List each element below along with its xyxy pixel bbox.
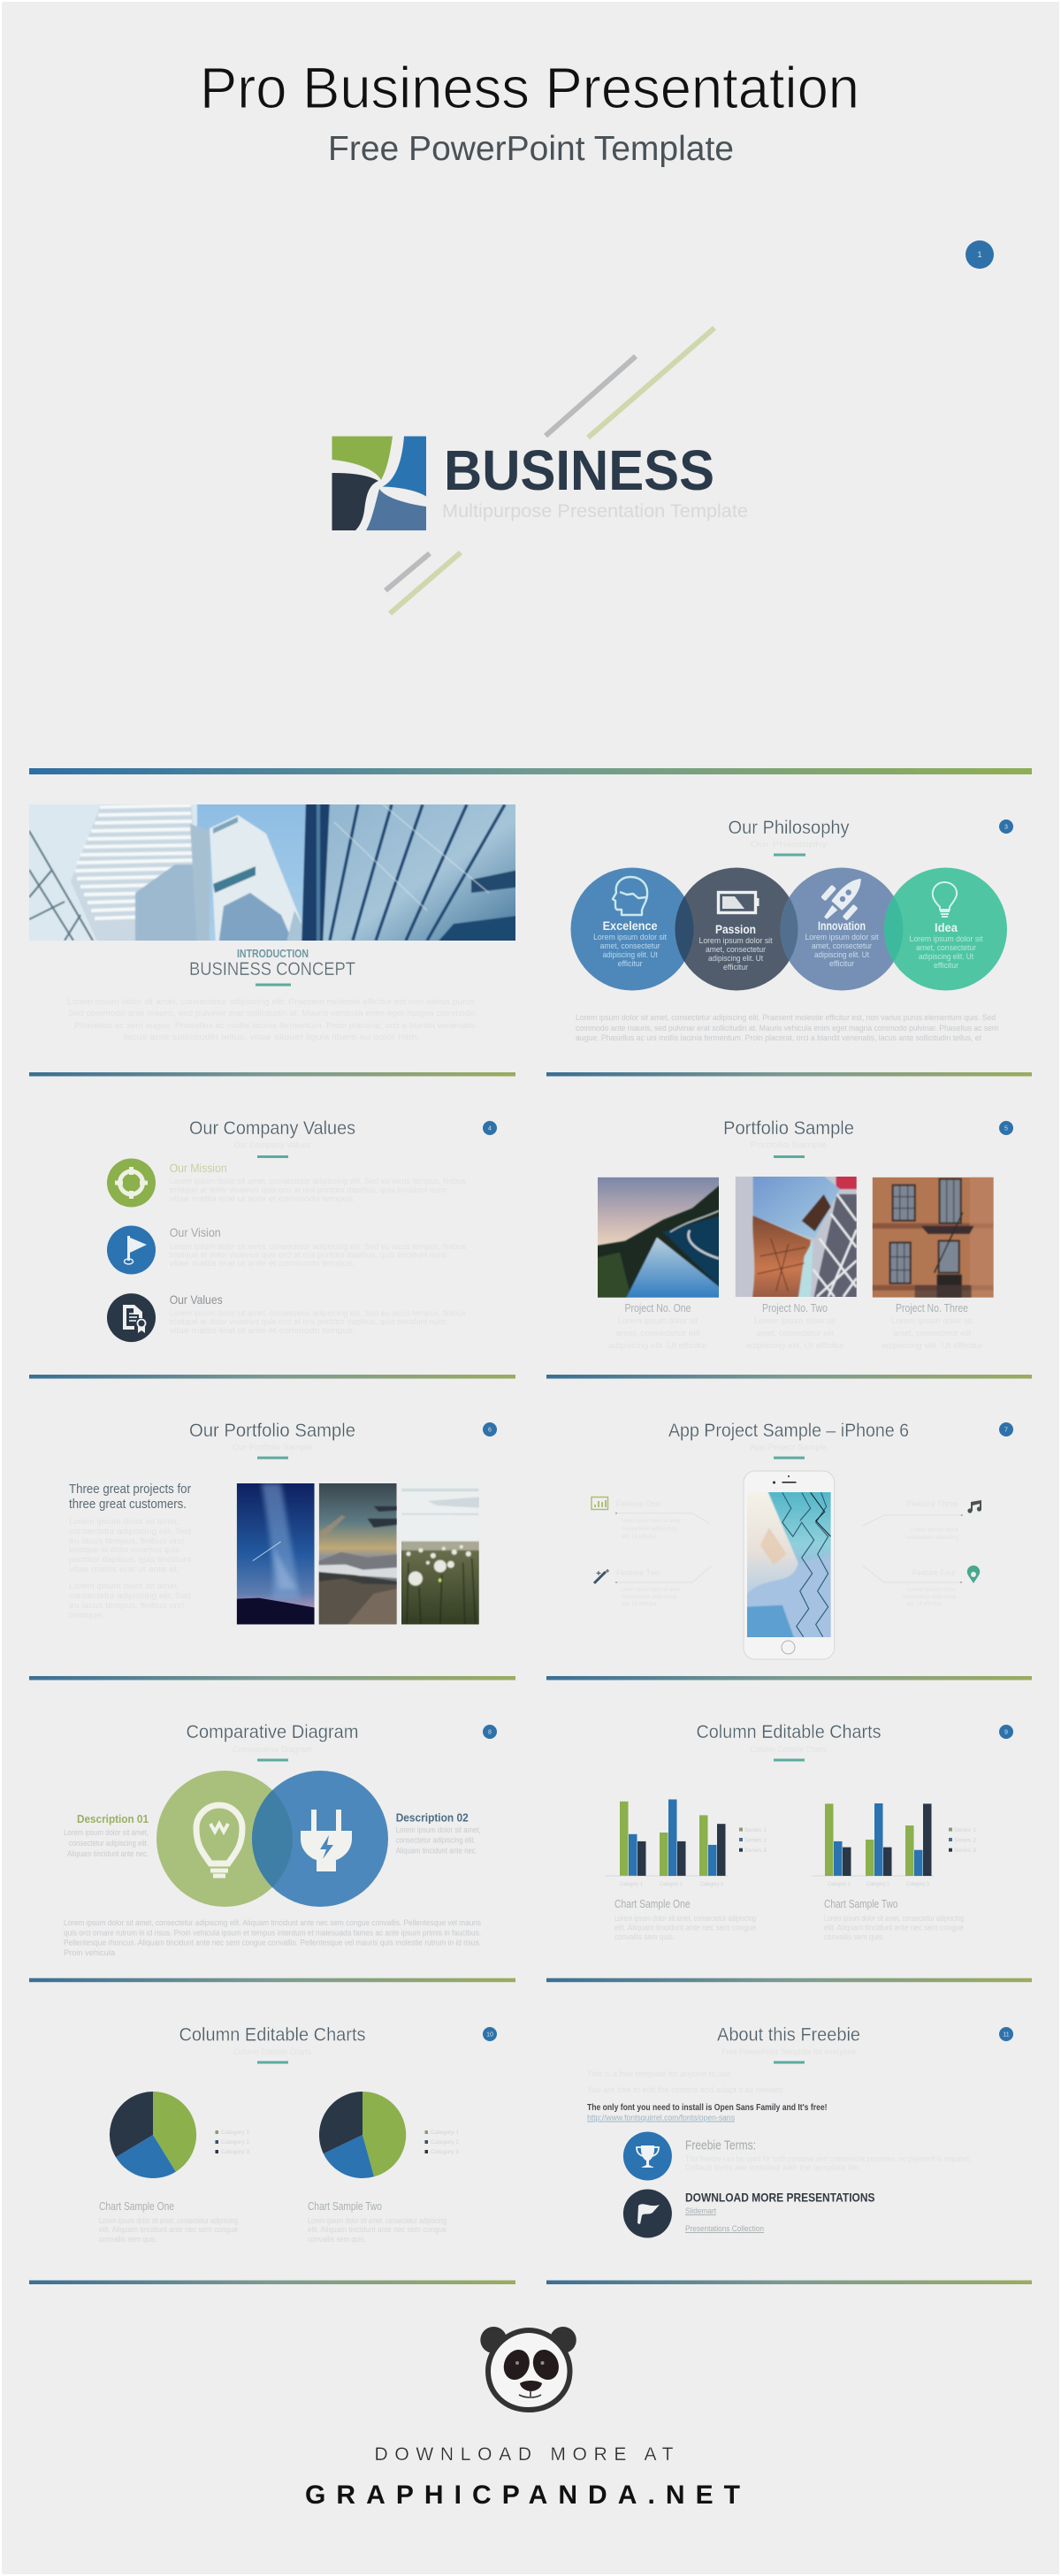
bar chart: two: Category 3 xyxy=(906,1882,930,1887)
font link: http://www.fontsquirrel.com/fonts/open-sans xyxy=(587,2113,735,2123)
page badge 3: 3 xyxy=(1004,824,1008,831)
footer xyxy=(305,2327,740,2510)
circle: innovation: Lorem ipsum dolor sit xyxy=(805,933,879,942)
circle: excelence xyxy=(571,868,693,990)
circle: innovation: amet, consectetur xyxy=(812,941,872,951)
caption: chart one: Chart Sample One xyxy=(99,2199,174,2213)
body text: consectetur adipiscing elit. Sed xyxy=(69,1527,191,1536)
lead text xyxy=(69,1482,191,1512)
item: our vision: Our Vision xyxy=(170,1225,221,1239)
circle: passion: amet, consectetur xyxy=(706,945,766,955)
page badge 11: 11 xyxy=(1003,2031,1010,2039)
icon: rocket xyxy=(813,867,874,930)
body text: quis orci ornare rutrum in id risus. Proin vehicula ipsum et tempus interdum et malesuada fames ac ante ipsum primis in faucibus. xyxy=(64,1929,481,1938)
body text: eu lacus tempus, finibus orci xyxy=(69,1536,184,1545)
subheading: Comparative Diagram xyxy=(233,1745,312,1754)
caption: chart one: elit. Aliquam tincidunt ante nec sem congue xyxy=(614,1924,756,1932)
item: our mission: Our Mission xyxy=(170,1161,227,1175)
overlap xyxy=(780,898,798,960)
caption: chart one: Lorem ipsum dolor sit amet, consectetur adipiscing xyxy=(99,2216,238,2225)
heading: Comparative Diagram xyxy=(186,1722,359,1742)
body text: Sed commodo ante mauris, sed pulvinar erat sollicitudin at. Mauris vehicula enim eget magna commodo. xyxy=(68,1009,477,1017)
caption: chart one: Chart Sample One xyxy=(614,1897,691,1910)
heading: About this Freebie xyxy=(717,2024,860,2046)
photo: denim and fence xyxy=(736,1177,857,1297)
caption: chart two xyxy=(824,1897,964,1941)
legend: Series 3 xyxy=(954,1848,977,1854)
circle: excelence: adipiscing elit. Ut xyxy=(603,950,658,960)
item: our mission: vitae mattis erat ut ante et commodo tempus. xyxy=(170,1194,355,1203)
accent bar xyxy=(257,2062,288,2063)
page badge 8: 8 xyxy=(488,1729,492,1736)
item: freebie terms: Freebie Terms: xyxy=(685,2139,756,2153)
panel: pie charts xyxy=(99,2024,497,2244)
photo: mountains xyxy=(318,1483,397,1625)
body text xyxy=(67,997,477,1041)
heading: Our Philosophy xyxy=(729,818,850,838)
accent bar xyxy=(774,1457,805,1459)
heading: Portfolio Sample xyxy=(723,1118,854,1139)
photo: milky way xyxy=(237,1483,315,1625)
body text: Lorem ipsum dolor sit amet, consectetur adipiscing elit. Praesent molestie efficitur est non varius purus. xyxy=(67,997,477,1006)
accent bar xyxy=(256,983,291,987)
description 01: Lorem ipsum dolor sit amet, xyxy=(64,1828,149,1837)
callout: feature three: Feature Three xyxy=(907,1499,958,1508)
panel: business concept xyxy=(29,800,523,1041)
item: our vision xyxy=(107,1225,466,1275)
subheading: Our Portfolio Sample xyxy=(233,1443,312,1452)
caption: chart two: Chart Sample Two xyxy=(308,2199,382,2213)
legend: Category 3 xyxy=(431,2150,460,2155)
divider: row 4 right xyxy=(546,1978,1032,1982)
description 02: Lorem ipsum dolor sit amet, xyxy=(396,1825,481,1834)
photo: coastal road xyxy=(598,1177,719,1298)
description 01 xyxy=(64,1813,149,1858)
speaker and camera xyxy=(773,1475,796,1483)
accent bar xyxy=(774,1759,805,1761)
divider: row 5 left xyxy=(29,2281,515,2284)
caption: chart one: Lorem ipsum dolor sit amet, consectetur adipiscing xyxy=(614,1914,756,1923)
callout: feature one xyxy=(592,1498,709,1540)
page badge 3 xyxy=(999,819,1013,834)
circle: passion xyxy=(676,868,798,990)
legend: Series 1 xyxy=(744,1828,767,1833)
logo wordmark: BUSINESS xyxy=(444,438,714,502)
caption: project one xyxy=(608,1301,707,1350)
overlap xyxy=(676,896,693,962)
circle: idea xyxy=(884,868,1007,990)
circle: innovation: adipiscing elit. Ut xyxy=(814,950,869,960)
body text: tristique. xyxy=(69,1611,104,1620)
icon: panda xyxy=(480,2327,576,2410)
callout: feature one: Feature One xyxy=(616,1499,660,1508)
overlap xyxy=(884,896,904,962)
accent bar xyxy=(257,1759,288,1761)
legend: Category 1 xyxy=(431,2130,460,2136)
body text: Proin vehicula xyxy=(64,1948,115,1957)
callout: feature one: consectetur adipiscing xyxy=(622,1527,676,1532)
divider: top xyxy=(29,768,1032,774)
page badge 10: 10 xyxy=(486,2031,493,2039)
description 01: consectetur adipiscing elit. xyxy=(69,1839,149,1848)
caption: chart one: elit. Aliquam tincidunt ante nec sem congue xyxy=(99,2225,238,2234)
phone screen xyxy=(747,1492,831,1637)
body text: Lorem ipsum dolor sit amet, consectetur adipiscing elit. Praesent molestie efficitur est, non varius purus elementum quis. Sed xyxy=(576,1013,996,1022)
circle: idea: amet, consectetur xyxy=(916,943,976,953)
page badge 11 xyxy=(999,2027,1013,2041)
bar chart: one: Category 3 xyxy=(700,1882,724,1887)
legend: Series 2 xyxy=(744,1839,767,1844)
font notice: The only font you need to install is Open Sans Family and It's free! xyxy=(587,2102,828,2113)
caption: chart one: convallis sem quis. xyxy=(99,2235,157,2244)
icon: head xyxy=(613,877,647,915)
divider: row 5 right xyxy=(546,2281,1032,2284)
item: our vision: Lorem ipsum dolor sit amet, consectetur adipiscing elit. Sed eu lacus tempus, finibus xyxy=(170,1242,466,1251)
legend xyxy=(949,1828,977,1854)
label: Innovation xyxy=(818,918,866,933)
venn diagram xyxy=(156,1771,388,1907)
page badge 9 xyxy=(999,1725,1013,1739)
callout: feature two xyxy=(594,1566,712,1607)
logo mark xyxy=(332,437,426,530)
item: download more: Slidemart xyxy=(685,2206,716,2216)
divider: row 4 left xyxy=(29,1978,515,1982)
item: our mission: tristique at dolor vivamus quis orci at nisl porttitor dapibus, quis tincidunt nunc xyxy=(170,1185,447,1194)
decorative diagonal bars xyxy=(385,328,714,614)
description 02: Description 02 xyxy=(396,1812,469,1825)
intro text xyxy=(587,2069,785,2094)
item: our values: Lorem ipsum dolor sit amet, consectetur adipiscing elit. Sed eu lacus tempus, finibus xyxy=(170,1308,466,1317)
callout: feature four: Lorem ipsum dolor xyxy=(907,1588,956,1593)
callout: feature three: consectetur adipiscing xyxy=(905,1536,958,1541)
caption: chart two: convallis sem quis. xyxy=(824,1932,884,1941)
circle: idea: Lorem ipsum dolor sit xyxy=(909,934,983,944)
item: our vision: vitae mattis erat ut ante et commodo tempus. xyxy=(170,1259,355,1268)
item: download more: Presentations Collection xyxy=(685,2224,764,2234)
panel: our portfolio sample xyxy=(69,1421,497,1629)
caption: chart two: elit. Aliquam tincidunt ante nec sem congue xyxy=(824,1924,964,1932)
label: Excelence xyxy=(603,918,658,933)
body text: vitae mattis erat ut ante et. xyxy=(69,1565,179,1574)
icon: music note xyxy=(967,1500,981,1513)
callout: feature four: elit. Ut efficitur xyxy=(906,1602,942,1607)
item: download more: DOWNLOAD MORE PRESENTATIONS xyxy=(685,2191,875,2205)
caption: chart one xyxy=(614,1897,756,1941)
caption: project three: amet, consectetur elit xyxy=(893,1329,972,1338)
home button xyxy=(782,1641,795,1654)
item: freebie terms xyxy=(623,2132,971,2180)
icon: trophy xyxy=(623,2132,672,2180)
item: our values xyxy=(107,1292,466,1342)
heading: Column Editable Charts xyxy=(697,1722,881,1742)
subheading: Free PowerPoint Template for everyone xyxy=(721,2047,856,2056)
body text: porttitor dapibus, quis tincidunt xyxy=(69,1555,192,1564)
bar chart: one: Category 2 xyxy=(660,1882,683,1887)
lead text: Three great projects for xyxy=(69,1482,191,1497)
description 02: Aliquam tincidunt ante nec. xyxy=(396,1846,477,1855)
cover logo: business xyxy=(332,328,748,614)
circle: excelence: efficitur xyxy=(618,959,643,969)
callout: feature three xyxy=(863,1499,981,1541)
page badge 5: 5 xyxy=(1004,1126,1008,1132)
circle: innovation: efficitur xyxy=(829,959,854,969)
panel: about this freebie xyxy=(587,2024,1013,2238)
body text: Pellentesque rhoncus. Aliquam tincidunt ante nec sem congue convallis. Pellentesque vel mauris quis molestie rutrum in id risus. xyxy=(64,1938,481,1947)
accent bar xyxy=(774,854,805,856)
item: our vision: tristique at dolor vivamus quis orci at nisl porttitor dapibus, quis tincidunt nunc xyxy=(170,1250,447,1259)
item: our values: Our Values xyxy=(170,1292,223,1307)
pie chart: two xyxy=(319,2092,460,2178)
lead text: three great customers. xyxy=(69,1498,187,1512)
body text: Lorem ipsum dolor sit amet, xyxy=(69,1517,179,1526)
item: freebie terms: Default fonts are installed with the template file. xyxy=(685,2163,861,2172)
subheading: Column Editable Charts xyxy=(750,1745,828,1754)
icon: magic wand xyxy=(594,1569,609,1583)
body text: augue. Phasellus ac uni mollis lacinia fermentum. Proin placerat, orci a blandit venenatis, lacus ante sollicitudin tellus, et xyxy=(576,1033,981,1042)
icon: plug xyxy=(301,1810,352,1871)
icon: certificate xyxy=(107,1293,156,1342)
caption: chart two: elit. Aliquam tincidunt ante nec sem congue xyxy=(308,2225,447,2234)
page badge 4 xyxy=(483,1121,497,1135)
bar chart: two xyxy=(812,1803,977,1887)
legend: Category 2 xyxy=(431,2140,460,2145)
callout: feature four xyxy=(863,1566,980,1607)
circle: passion: adipiscing elit. Ut xyxy=(708,954,763,964)
icon: light bulb xyxy=(933,882,957,917)
description 01: Description 01 xyxy=(77,1813,149,1825)
subheading: Our Philosophy xyxy=(750,840,828,849)
legend: Series 3 xyxy=(744,1848,767,1854)
page badge 6: 6 xyxy=(488,1427,492,1434)
legend: Series 2 xyxy=(954,1839,977,1844)
callout: feature two: elit. Ut efficitur xyxy=(622,1602,657,1607)
logo tagline: Multipurpose Presentation Template xyxy=(442,501,748,522)
page badge 7 xyxy=(999,1422,1013,1437)
photo: brick building xyxy=(872,1177,994,1298)
caption: project one: amet, consectetur elit xyxy=(615,1329,700,1338)
subheading: App Project Sample xyxy=(750,1443,828,1452)
item: freebie terms: This freebie can be used for both personal and commercial purposes, no payment is required. xyxy=(685,2154,971,2163)
caption: project three xyxy=(881,1301,983,1350)
bar chart: two: Category 2 xyxy=(866,1882,890,1887)
caption: project two: Project No. Two xyxy=(762,1301,828,1315)
subheading: Portfolio Sample xyxy=(750,1140,828,1149)
panel: column editable charts xyxy=(605,1722,1013,1941)
item: our mission xyxy=(107,1158,466,1208)
circle: passion: Lorem ipsum dolor sit xyxy=(698,936,773,946)
callout: feature two: Lorem ipsum dolor sit amet xyxy=(622,1588,680,1593)
legend: Category 1 xyxy=(221,2130,250,2136)
bar chart: one xyxy=(605,1800,767,1887)
caption: project three: Project No. Three xyxy=(896,1301,968,1315)
divider: row 1 right xyxy=(546,1072,1032,1077)
caption: chart two: convallis sem quis. xyxy=(308,2235,366,2244)
subtitle: Free PowerPoint Template xyxy=(328,130,734,168)
body text: eu lacus tempus, finibus orci xyxy=(69,1601,184,1610)
caption: chart two: Lorem ipsum dolor sit amet, consectetur adipiscing xyxy=(308,2216,447,2225)
page badge 8 xyxy=(483,1725,497,1739)
description 02: consectetur adipiscing elit. xyxy=(396,1835,476,1844)
legend: Category 2 xyxy=(221,2140,250,2145)
caption: project one: Lorem ipsum dolor sit xyxy=(618,1316,698,1325)
body text xyxy=(64,1918,481,1957)
circle: passion: efficitur xyxy=(723,963,748,972)
panel: app project sample xyxy=(592,1421,1013,1659)
caption: chart one xyxy=(99,2199,238,2244)
caption: project two: Lorem ipsum dolor sit xyxy=(754,1316,836,1325)
panel: company values xyxy=(107,1118,497,1342)
page badge 1 xyxy=(966,240,994,269)
title: Pro Business Presentation xyxy=(200,55,859,120)
caption: project three: Lorem ipsum dolor sit xyxy=(891,1316,973,1325)
legend: Category 3 xyxy=(221,2150,250,2155)
icon: map pin xyxy=(967,1566,980,1583)
website: GRAPHICPANDA.NET xyxy=(305,2481,740,2510)
panel: comparative diagram xyxy=(64,1722,497,1957)
body text: consectetur adipiscing elit. Sed xyxy=(69,1591,191,1600)
intro text: This is a free template for anyone to use. xyxy=(587,2069,733,2078)
body text xyxy=(576,1013,998,1042)
page badge 10 xyxy=(483,2027,497,2041)
legend xyxy=(739,1828,767,1854)
body text: tristique at dolor vivamus quis xyxy=(69,1545,180,1554)
heading: Column Editable Charts xyxy=(179,2024,366,2046)
icon: light bulb xyxy=(196,1805,242,1876)
icon: flag xyxy=(107,1225,156,1275)
body text: commodo ante mauris, sed pulvinar erat sollicitudin at. Mauris vehicula enim eget magna commodo pulvinar. Phasellus ac sem xyxy=(576,1024,998,1033)
accent bar xyxy=(257,1155,288,1158)
subheading: Our Company Values xyxy=(233,1140,311,1149)
circle: excelence: amet, consectetur xyxy=(600,941,660,951)
icon: target xyxy=(107,1158,156,1208)
heading: App Project Sample – iPhone 6 xyxy=(668,1421,909,1441)
accent bar xyxy=(257,1457,288,1459)
divider: row 1 left xyxy=(29,1072,515,1077)
caption: project one: Project No. One xyxy=(624,1301,691,1315)
caption: chart two: Lorem ipsum dolor sit amet, consectetur adipiscing xyxy=(824,1914,964,1923)
caption: project two: amet, consectetur elit xyxy=(756,1329,835,1338)
description 01: Aliquam tincidunt ante nec. xyxy=(67,1849,149,1858)
body text: Phasellus ac sem augue. Phasellus ac mollis lacinia fermentum. Proin placerat, orci a blandit venenatis. xyxy=(74,1021,477,1030)
bar chart: one: Category 1 xyxy=(620,1882,644,1887)
icon: flag xyxy=(623,2189,672,2238)
body text: lacus ante sollicitudin tellus, vitae aliquet ligula libero eu dolor nibh. xyxy=(124,1033,420,1041)
item: our mission: Lorem ipsum dolor sit amet, consectetur adipiscing elit. Sed eu lacus tempus, finibus xyxy=(170,1177,466,1185)
legend: Series 1 xyxy=(954,1828,977,1833)
page badge 9: 9 xyxy=(1004,1729,1008,1736)
legend xyxy=(216,2130,250,2155)
iphone mockup xyxy=(743,1471,836,1659)
heading: BUSINESS CONCEPT xyxy=(189,959,355,979)
accent bar xyxy=(774,2062,805,2063)
page badge 6 xyxy=(483,1422,497,1437)
label: Passion xyxy=(715,922,756,936)
panel: our philosophy xyxy=(571,818,1013,1042)
photo: buildings xyxy=(29,804,515,941)
panel: portfolio sample xyxy=(593,1118,1013,1350)
photo: dandelions xyxy=(401,1489,479,1625)
page badge 4: 4 xyxy=(488,1126,492,1132)
icon: chart xyxy=(592,1498,608,1510)
caption: project two: adipiscing elit. Ut efficitur xyxy=(745,1341,844,1350)
page badge 5 xyxy=(999,1121,1013,1135)
circle: idea: efficitur xyxy=(934,961,958,971)
caption: project two xyxy=(745,1301,844,1350)
item: our values: tristique at dolor vivamus quis orci at nisl porttitor dapibus, quis tincidunt nunc xyxy=(170,1317,447,1326)
page badge 7: 7 xyxy=(1004,1427,1008,1434)
callout: feature one: Lorem ipsum dolor sit amet xyxy=(622,1519,680,1524)
intro text: You are free to edit the content and adapt it as needed. xyxy=(587,2085,785,2094)
caption: chart one: convallis sem quis. xyxy=(614,1932,675,1941)
accent bar xyxy=(774,1155,805,1158)
heading: Our Portfolio Sample xyxy=(189,1421,355,1441)
body text: Lorem ipsum dolor sit amet, consectetur adipiscing elit. Aliquam tincidunt ante nec sem congue convallis. Pellentesque vel mauris xyxy=(64,1918,481,1927)
callout: feature four: consectetur adipiscing xyxy=(903,1595,956,1600)
divider: row 3 left xyxy=(29,1676,515,1680)
subheading: Column Editable Charts xyxy=(233,2047,311,2056)
caption: project one: adipiscing elit. Ut efficitur xyxy=(608,1341,707,1350)
item: download more xyxy=(623,2189,875,2238)
heading: Our Company Values xyxy=(189,1118,355,1139)
icon: battery xyxy=(718,893,759,912)
eyebrow: INTRODUCTION xyxy=(237,947,309,960)
circle: innovation xyxy=(780,868,894,990)
bar chart: two: Category 1 xyxy=(828,1882,851,1887)
circle: idea: adipiscing elit. Ut xyxy=(919,952,973,962)
callout: feature two: Feature Two xyxy=(616,1568,660,1577)
circle: excelence: Lorem ipsum dolor sit xyxy=(593,933,667,942)
item: our values: vitae mattis erat ut ante et commodo tempus. xyxy=(170,1326,355,1335)
callout: feature four: Feature Four xyxy=(912,1568,956,1577)
body text xyxy=(69,1517,192,1620)
divider: row 2 left xyxy=(29,1375,515,1379)
download line: DOWNLOAD MORE AT xyxy=(375,2444,674,2465)
callout: feature one: elit. Ut efficitur xyxy=(622,1535,657,1540)
caption: chart two: Chart Sample Two xyxy=(824,1897,898,1910)
label: Idea xyxy=(935,920,958,934)
page badge 1: 1 xyxy=(977,250,982,259)
description 02 xyxy=(396,1812,481,1855)
body text: Lorem ipsum dolor sit amet, xyxy=(69,1581,179,1590)
pie chart: one xyxy=(110,2092,250,2178)
callout: feature three: Lorem ipsum dolor xyxy=(910,1528,958,1533)
divider: row 3 right xyxy=(546,1676,1032,1680)
legend xyxy=(424,2130,460,2155)
caption: chart two xyxy=(308,2199,447,2244)
callout: feature two: consectetur adipiscing xyxy=(622,1595,676,1600)
caption: project three: adipiscing elit. Ut efficitur xyxy=(881,1341,983,1350)
divider: row 2 right xyxy=(546,1375,1032,1379)
